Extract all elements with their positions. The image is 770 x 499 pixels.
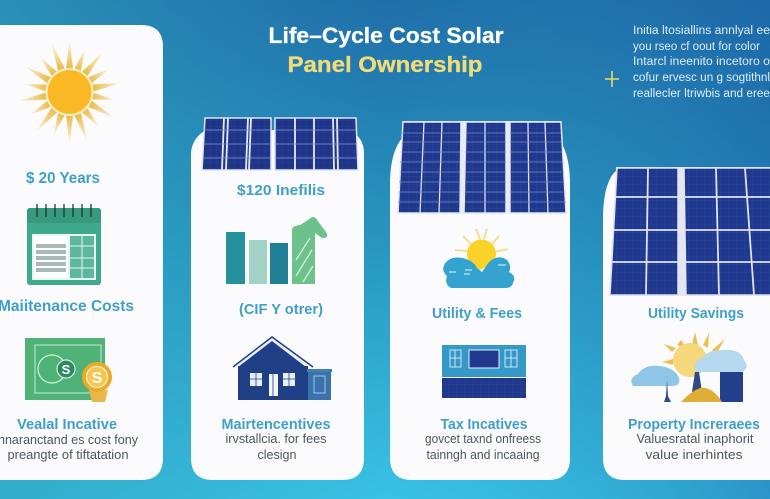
card background [603,170,770,480]
heading: tax incentives: Tax Incatives [440,416,528,433]
title: Life–Cycle Cost Solar [268,23,504,48]
panel: years and maintenance costs [0,25,163,480]
intro text block: Intarcl ineenito incetoro o [633,56,770,68]
icon: plus sign [605,71,619,87]
intro text block: you rseo cf oout for color [633,41,760,53]
heading: property increases: Property Increraees [628,416,760,433]
description [425,432,541,462]
intro text block: cofur ervesc un g sogtithnl [633,72,770,84]
title: Panel Ownership [288,52,482,77]
icon: calendar [27,204,101,285]
heading: utility savings: Utility Savings [648,305,744,322]
heading: per year: (CIF Y otrer) [239,301,323,318]
description: govcet taxnd onfreess [425,432,541,446]
intro text block [633,25,770,100]
panel: installation and maintenance incentives [191,118,364,480]
description: clesign [258,448,297,462]
description: value inerhintes [646,448,742,462]
description: tainngh and incaaing [426,448,540,462]
solar panels [397,121,567,214]
title [268,23,504,77]
icon: banknote and coin: S [62,362,71,377]
description: nnaranctand es cost fony [0,433,139,447]
solar panels [609,167,770,296]
description: Valuesratal inaphorit [636,432,754,446]
card background [0,25,163,480]
heading: maintenance costs: Maiitenance Costs [0,298,134,315]
bar chart [226,217,327,284]
icon: house [233,337,332,400]
heading: years: $ 20 Years [26,170,100,187]
description [0,433,139,462]
panel: utility savings and property increases [603,167,770,480]
heading: incentive: Vealal Incative [17,416,117,433]
panel: utility fees and tax incentives [390,121,570,480]
description [636,432,754,462]
icon: building with solar roof [442,345,526,398]
card background [191,130,364,480]
icon: sun [18,40,121,144]
icon: sun and cloud [443,229,514,288]
description: irvstallcia. for fees [226,432,326,446]
intro text block: reallecler ltriwbis and eree [633,88,770,100]
heading: utility and fees: Utility & Fees [432,305,522,322]
description: preangte of tiftatation [8,448,129,462]
intro text block: Initia ltosiallins annlyal ee [633,25,770,37]
icon: banknote and coin: S [92,370,103,387]
description [226,432,326,462]
icon: banknote and coin [25,338,112,402]
card background [390,137,570,480]
heading: cost: $120 Inefilis [237,182,325,199]
solar panels [202,118,358,170]
heading: maintenance incentives: Mairtencentives [222,416,330,433]
icon: sun, clouds and house [631,332,747,402]
